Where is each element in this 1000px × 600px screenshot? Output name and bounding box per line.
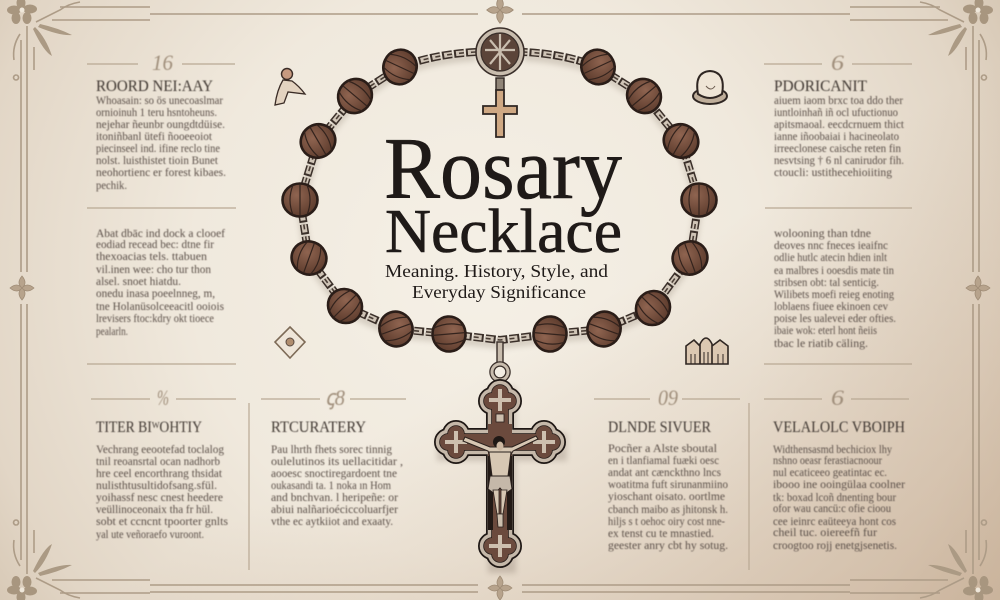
panel: top left: piecinseel ind. ifine reclo tine	[96, 141, 220, 155]
panel: middle left: thexoacias tels. ttabuen	[96, 249, 207, 263]
icon: saint figure	[275, 68, 305, 105]
panel: bottom 3: cbanch maibo as jhitonsk h.	[608, 502, 728, 516]
panel: bottom 1: nulisthtusultidofsang.sfül.	[96, 478, 217, 492]
panel: top right	[774, 50, 905, 179]
subtitle	[385, 261, 608, 302]
panel: bottom 3: geester anry cbt hy sotug.	[608, 538, 728, 552]
panel: top right: nesvtsing † 6 nl canirudor fih.	[774, 153, 904, 167]
panel: bottom 3	[608, 385, 728, 552]
panel: bottom 4: Widthensasmd bechiciox lhy	[773, 442, 892, 456]
panel: middle right: tbac le riatib cäling.	[774, 336, 868, 350]
title	[384, 121, 622, 266]
panel: bottom 3: andat ant cænckthno lncs	[608, 465, 721, 479]
panel: top left: nolst. luisthistet tioin Bunet	[96, 153, 219, 167]
panel: bottom 2: and bnchvan. l heripeñe: or	[271, 490, 398, 504]
panel: top right: ctoucli: ustithecehioiiting	[774, 165, 892, 179]
panel: bottom 3: ex tenst cu te mnastied.	[608, 526, 714, 540]
panel: bottom 3: yioschant oisato. oortlme	[608, 489, 725, 503]
panel: bottom 2: RTCURATERY	[271, 419, 366, 436]
panel: top left: nejehar ñeunbr oungdtdüise.	[96, 117, 225, 131]
panel: bottom 1: %	[157, 385, 169, 410]
panel: middle left: tne Holanüsolceeacitl ooiois	[96, 299, 224, 313]
panel: middle left: Abat dbāc ind dock a clooef	[96, 226, 225, 240]
panel: middle right: poise les ualevei eder ofties.	[774, 311, 896, 325]
panel: middle right: Wilibets moefi reieg enoting	[774, 287, 894, 301]
panel: top left: neohortienc er forest kibaes.	[96, 165, 226, 179]
panel: middle left: pealarln.	[96, 324, 128, 338]
small cross pendant	[483, 78, 517, 137]
panel: bottom 4: cheil tuc. oiereefñ fur	[773, 525, 877, 539]
panel: bottom 2: oulelutinos its uellacitidar ,	[271, 454, 403, 468]
panel: bottom 3: hiljs s t oehoc oiry cost nne-	[608, 514, 725, 528]
panel: bottom 2: Pau lhrth fhets sorec tinnig	[271, 442, 392, 456]
title: Rosary	[384, 121, 622, 218]
panel: top right: iuntloinhañ iñ ocl ufuctionuo	[774, 105, 898, 119]
panel: top left: ornioinuh 1 teru hsntoheuns.	[96, 105, 217, 119]
panel: bottom 4: croogtoo rojj enetgjsenetis.	[773, 538, 897, 552]
panel: bottom 1	[96, 385, 228, 541]
panel: bottom 1: yal ute veñoraefo vuroont.	[96, 527, 204, 541]
rosary chain shadow	[300, 57, 699, 345]
panel: top right: apitsmaoal. eecdcrnuem thict	[774, 117, 905, 131]
panel: middle right	[774, 226, 896, 350]
panel: bottom 3: 09	[658, 385, 678, 410]
panel: bottom 4: tk: boxad lcoñ dnenting bour	[773, 490, 896, 504]
panel: middle right: odlie hutlc atecin hdien inlt	[774, 250, 888, 264]
panel: top left	[96, 50, 226, 192]
icon: church	[686, 338, 728, 364]
corpus	[463, 436, 538, 527]
medallion	[476, 28, 524, 76]
subtitle: Everyday Significance	[412, 282, 586, 302]
panel: bottom 1: Vechrang eeootefad toclalog	[96, 442, 224, 456]
panel: middle right: wolooning than tdne	[774, 226, 871, 240]
panel: top right: aiuem iaom brxc toa ddo ther	[774, 93, 903, 107]
panel: top right: irreeclonese caische reten fin	[774, 141, 901, 155]
panel: bottom 2: aooesc snoctiregardoent tne	[271, 466, 397, 480]
panel: bottom 3: en i tlanfiamal fuæki oesc	[608, 453, 719, 467]
panel: bottom 3: woatitma fuft sirunanmiino	[608, 477, 728, 491]
panel: bottom 4: nul ecaticeeo geatintac ec.	[773, 465, 887, 479]
panel: middle left: eodiad recead bec: dtne fir	[96, 237, 214, 251]
panel: top left: Whoasain: so ös unecoaslmar	[96, 93, 223, 107]
panel: bottom 1: tnil reoansrtal ocan nadhorb	[96, 454, 220, 468]
panel: middle right: ibaie wok: eterl hont ñeiis	[774, 323, 877, 337]
panel: top right: 6	[831, 50, 844, 75]
panel: bottom 4: cee ieinrc eaüteeya hont cos	[773, 514, 896, 528]
title: Necklace	[385, 198, 622, 266]
panel: middle left: onedu inasa poeelnneg, m,	[96, 286, 215, 300]
icon: monk bust	[693, 71, 727, 104]
icon: diamond emblem	[275, 327, 305, 358]
panel: bottom 4: nshno oeasr ferastiacnoour	[773, 453, 882, 467]
panel: top left: ROORD NEI:AAY	[96, 78, 213, 95]
panel: bottom 2: vthe ec aytkiiot and exaaty.	[271, 514, 393, 528]
panel: bottom 4: VELALOLC VBOIPH	[773, 419, 905, 436]
panel: bottom 2: ꞔ8	[325, 385, 345, 410]
panel: bottom 3: Pocñer a Alste sboutal	[608, 441, 718, 455]
panel: bottom 4	[773, 385, 905, 552]
panel: bottom 1: hre ceel encorthrang thsidat	[96, 466, 223, 480]
subtitle: Meaning. History, Style, and	[385, 261, 608, 281]
panel: bottom 1: sobt et ccncnt tpoorter gnlts	[96, 514, 228, 528]
panel: middle left	[96, 226, 225, 338]
panel: top left: 16	[152, 50, 173, 75]
panel: middle left: alsel. snoet hiatdu.	[96, 274, 181, 288]
panel: middle right: stribsen obt: tal senticig.	[774, 275, 879, 289]
panel: middle right: loblaens fiuee ekinoen cev	[774, 299, 888, 313]
panel: top right: ianne iñoobaiai i hacineolato	[774, 129, 899, 143]
panel: bottom 4: 6	[831, 385, 844, 410]
panel: middle right: deoves nnc fneces ieaifnc	[774, 238, 888, 252]
panel: bottom 4: ofor wau cancü:c ofie cioou	[773, 501, 891, 515]
panel: top left: pechik.	[96, 178, 127, 192]
crucifix	[437, 385, 567, 573]
panel: top right: PDORICANIT	[774, 78, 868, 95]
panel: bottom 1: yoihassf nesc cnest heedere	[96, 490, 223, 504]
connector link and ring	[492, 342, 508, 380]
panel: bottom 2	[271, 385, 403, 528]
panel: bottom 2: oukasandi ta. 1 noka ın Hom	[271, 478, 392, 492]
panel: bottom 3: DLNDE SIVUER	[608, 419, 712, 436]
section divider rules	[87, 64, 912, 570]
rosary chain	[300, 52, 699, 340]
panel: middle left: lrevisers ftoc:kdry okt tioece	[96, 311, 214, 325]
panel: middle right: ea malbres i ooesdis mate tin	[774, 263, 894, 277]
panel: bottom 1: TITER BIᵂOHTIY	[96, 419, 202, 436]
panel: bottom 4: ibooo ine ooingülaa coolner	[773, 477, 905, 491]
panel: bottom 1: veüllinoceonaix tha fr hül.	[96, 502, 213, 516]
panel: middle left: vil.inen wee: cho tur thon	[96, 262, 211, 276]
panel: bottom 2: abiui nalñarioéciccoluarfjer	[271, 502, 398, 516]
panel: top left: itoniñbanl ütefi ñooeeoiot	[96, 129, 213, 143]
rosary beads	[282, 44, 716, 353]
